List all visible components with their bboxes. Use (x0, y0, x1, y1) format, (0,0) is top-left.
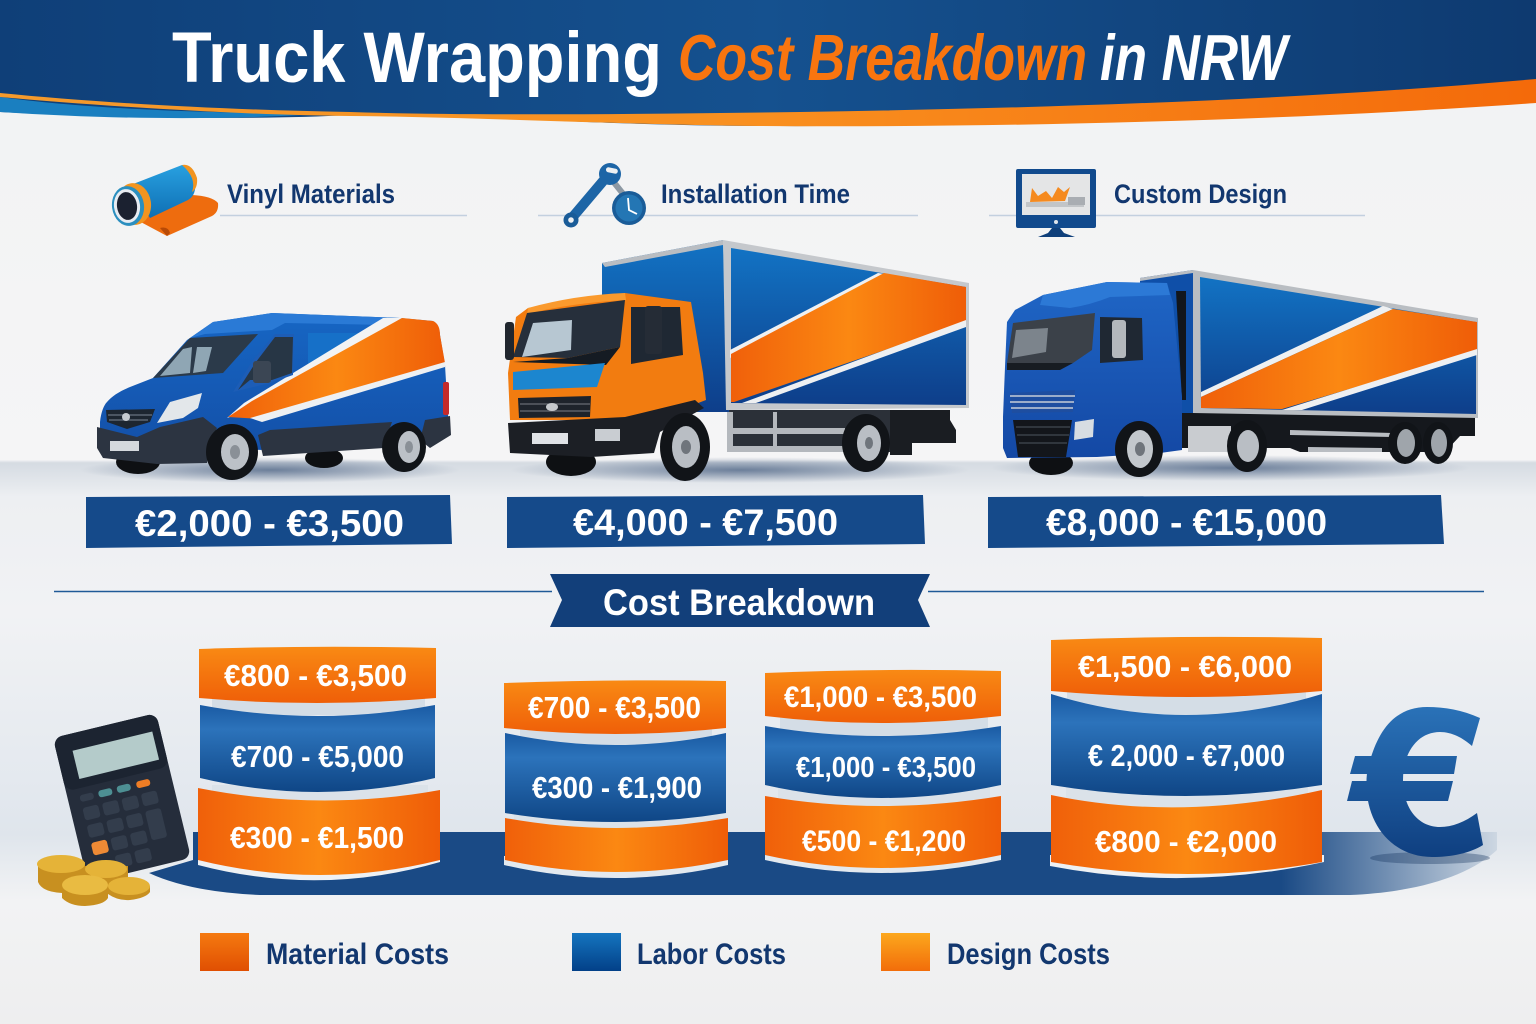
column 3 design cost label: €500 - €1,200 (802, 825, 966, 858)
column 3 material cost band: €1,000 - €3,500 (784, 681, 977, 714)
coins icon (37, 855, 150, 906)
title (172, 19, 1291, 98)
legend: design costs: Design Costs (947, 938, 1110, 971)
icon: euro symbol (1347, 707, 1490, 864)
price ribbon: semi truck (988, 495, 1444, 548)
column 2 design cost band (504, 818, 728, 878)
van lower trim (97, 416, 451, 464)
column 3 labor cost band: €1,000 - €3,500 (796, 752, 976, 784)
column 2 (504, 680, 728, 878)
icon: vinyl roll (109, 165, 218, 236)
column 1 labor cost band (200, 705, 435, 792)
category: vinyl materials (109, 165, 467, 236)
column 4 design cost band (1050, 790, 1324, 878)
price ribbon: box truck: €4,000 - €7,500 (573, 502, 838, 543)
legend: material costs: Material Costs (266, 938, 449, 971)
column 4 material cost band: €1,500 - €6,000 (1078, 649, 1292, 684)
semi truck illustration (990, 270, 1478, 481)
van illustration (80, 313, 460, 483)
column 2 labor cost band: €300 - €1,900 (532, 770, 702, 805)
title: in NRW (1100, 21, 1291, 94)
title: Truck Wrapping (172, 19, 662, 98)
category: installation time (538, 163, 918, 228)
legend: labor costs (572, 933, 786, 971)
column 4 (1050, 637, 1324, 878)
header banner (0, 0, 1536, 126)
column 1 material cost band (199, 647, 436, 703)
column 1 design cost band (198, 788, 440, 880)
box truck illustration (505, 240, 970, 483)
label: Installation Time: Installation Time (661, 179, 850, 209)
column 1 labor cost band: €700 - €5,000 (231, 739, 404, 774)
legend (200, 933, 1110, 971)
legend: labor costs: Labor Costs (637, 938, 786, 971)
column 3 material cost band (765, 670, 1001, 723)
base platform (149, 832, 1497, 895)
section heading: Cost Breakdown (550, 574, 930, 627)
column 1 (198, 647, 440, 880)
category: custom design (989, 169, 1365, 237)
column 1 material cost band: €800 - €3,500 (224, 658, 407, 693)
column 4 design cost band: €800 - €2,000 (1095, 824, 1277, 859)
icon: wrench and clock (564, 163, 646, 228)
column 4 material cost band (1051, 637, 1322, 697)
calculator icon (53, 713, 191, 883)
column 4 labor cost band: € 2,000 - €7,000 (1088, 738, 1285, 773)
column 3 (765, 670, 1001, 873)
section heading: Cost Breakdown: Cost Breakdown (603, 582, 875, 623)
price ribbon: semi truck: €8,000 - €15,000 (1046, 502, 1327, 543)
column 3 design cost band (765, 796, 1001, 873)
header swoosh: light blue (0, 97, 330, 118)
price ribbon: van (86, 495, 452, 548)
price ribbon: van: €2,000 - €3,500 (135, 503, 404, 544)
column 1 design cost band: €300 - €1,500 (230, 820, 404, 855)
label: Vinyl Materials: Vinyl Materials (227, 179, 395, 209)
column 3 labor cost band (765, 726, 1001, 798)
title: Cost Breakdown (678, 21, 1087, 94)
icon: monitor with design (1016, 169, 1096, 237)
column 2 material cost band: €700 - €3,500 (528, 690, 701, 725)
label: Custom Design: Custom Design (1114, 179, 1287, 209)
header swoosh: orange (0, 79, 1536, 126)
price ribbon: box truck (507, 495, 925, 548)
legend: design costs (881, 933, 1110, 971)
legend: material costs (200, 933, 449, 971)
column 4 labor cost band (1051, 694, 1322, 796)
column 2 material cost band (504, 680, 726, 734)
column 2 labor cost band (505, 733, 726, 822)
